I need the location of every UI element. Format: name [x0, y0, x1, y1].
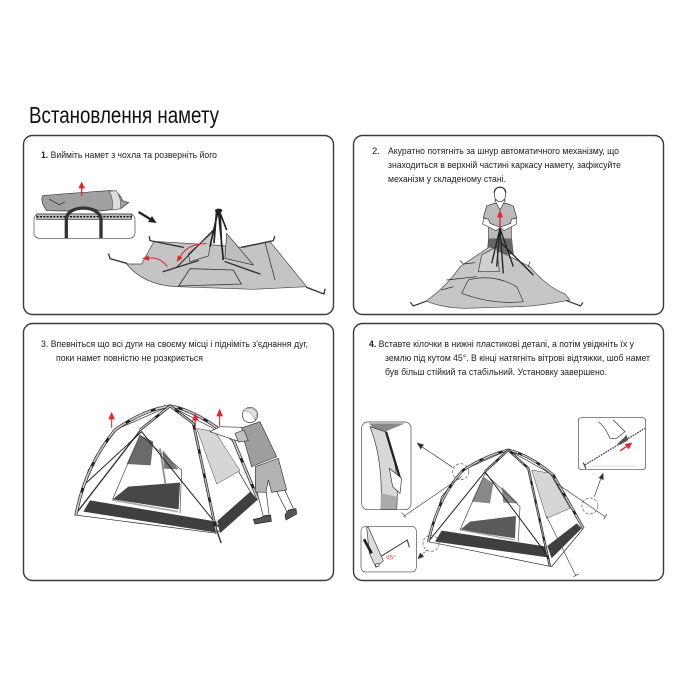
step 4 text	[369, 339, 651, 378]
inset: ground hook	[361, 526, 416, 572]
step 4 illustration	[361, 418, 646, 577]
inset: arc joint	[362, 422, 411, 510]
step 4 text: був більш стійкий та стабільний. Установку завершено.	[385, 367, 607, 378]
title: Встановлення намету	[29, 102, 219, 128]
panel: step 3	[24, 324, 334, 580]
step 2 text: знаходиться в верхній частині каркасу намету, зафіксуйте	[388, 160, 621, 171]
dashed callout circles and arrows	[417, 443, 604, 559]
step 1 text: 1. Вийміть намет з чохла та розверніть його	[41, 150, 217, 161]
step 2 text	[372, 146, 621, 185]
inset: ground hook: 45°	[386, 553, 396, 561]
step 2 text: механізм у складеному стані.	[388, 174, 506, 185]
step 3 text: 3. Впевніться що всі дуги на своєму місці і підніміть з'єднання дуг,	[41, 339, 308, 350]
step 3 illustration	[75, 406, 297, 543]
guy lines and pegs	[402, 477, 607, 577]
step 2 text: 2.	[372, 146, 380, 157]
step 4 text: 4. Вставте кілочки в нижні пластикові деталі, а потім увідкніть їх у	[369, 339, 634, 350]
person	[210, 407, 297, 524]
step 3 text: поки намет повністю не розкриється	[56, 353, 203, 364]
step 2 illustration	[411, 187, 583, 308]
step 4 text: землю під кутом 45°. В кінці натягніть вітрові відтяжки, шоб намет	[385, 353, 651, 364]
tent	[428, 450, 583, 567]
step 2 text: Акуратно потягніть за шнур автоматичного механізму, що	[388, 146, 619, 157]
red arrows	[108, 409, 223, 429]
panel: step 1	[24, 136, 334, 314]
inset: peg stake	[578, 418, 646, 470]
step 3 text	[41, 339, 308, 364]
panel: step 2	[354, 136, 664, 314]
panel: step 4	[354, 324, 664, 580]
step 1 illustration	[34, 182, 325, 294]
tent body	[75, 406, 258, 543]
